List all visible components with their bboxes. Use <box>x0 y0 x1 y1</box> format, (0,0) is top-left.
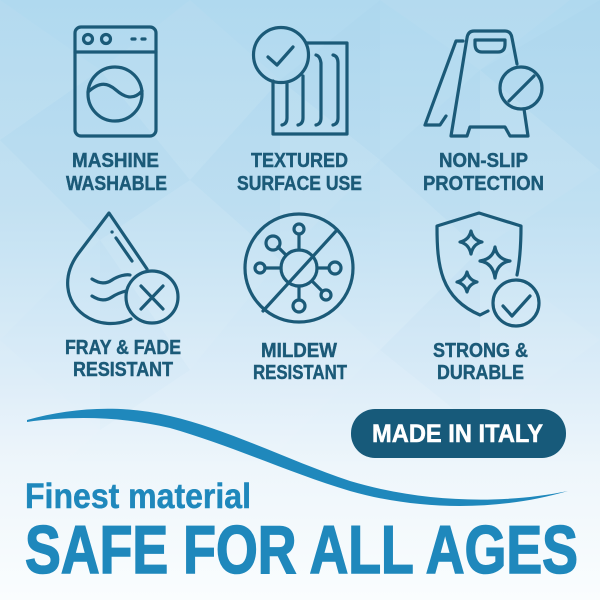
badge: made in italy: MADE IN ITALY <box>372 420 543 448</box>
label: mildew resistant: RESISTANT <box>253 362 347 384</box>
label: mildew resistant <box>253 340 347 384</box>
icon: washing machine <box>75 27 156 136</box>
label: mashine washable <box>66 150 167 195</box>
label: fray and fade resistant <box>65 337 181 381</box>
label: textured surface use: SURFACE USE <box>237 173 362 195</box>
label: mashine washable: MASHINE <box>72 150 159 172</box>
label: non-slip protection: PROTECTION <box>423 173 544 195</box>
icon: water drop with cross <box>68 213 178 324</box>
icon: shield with check <box>437 213 539 326</box>
label: textured surface use <box>237 150 362 195</box>
label: fray and fade resistant: RESISTANT <box>73 359 173 381</box>
label: non-slip protection <box>423 150 544 195</box>
label: mildew resistant: MILDEW <box>261 340 337 362</box>
label: mashine washable: WASHABLE <box>66 173 167 195</box>
label: strong and durable: DURABLE <box>437 362 524 384</box>
label: strong and durable: STRONG & <box>433 340 528 362</box>
icon: non-slip sign <box>425 31 542 136</box>
badge: made in italy <box>351 409 566 458</box>
wave swoosh <box>27 409 568 506</box>
icon: mildew crossed out <box>245 214 353 322</box>
subheading: Finest material <box>25 477 251 516</box>
icon: textured surface <box>254 28 347 134</box>
label: non-slip protection: NON-SLIP <box>439 150 528 172</box>
label: textured surface use: TEXTURED <box>251 150 348 172</box>
label: strong and durable <box>433 340 528 384</box>
label: fray and fade resistant: FRAY & FADE <box>65 337 181 359</box>
